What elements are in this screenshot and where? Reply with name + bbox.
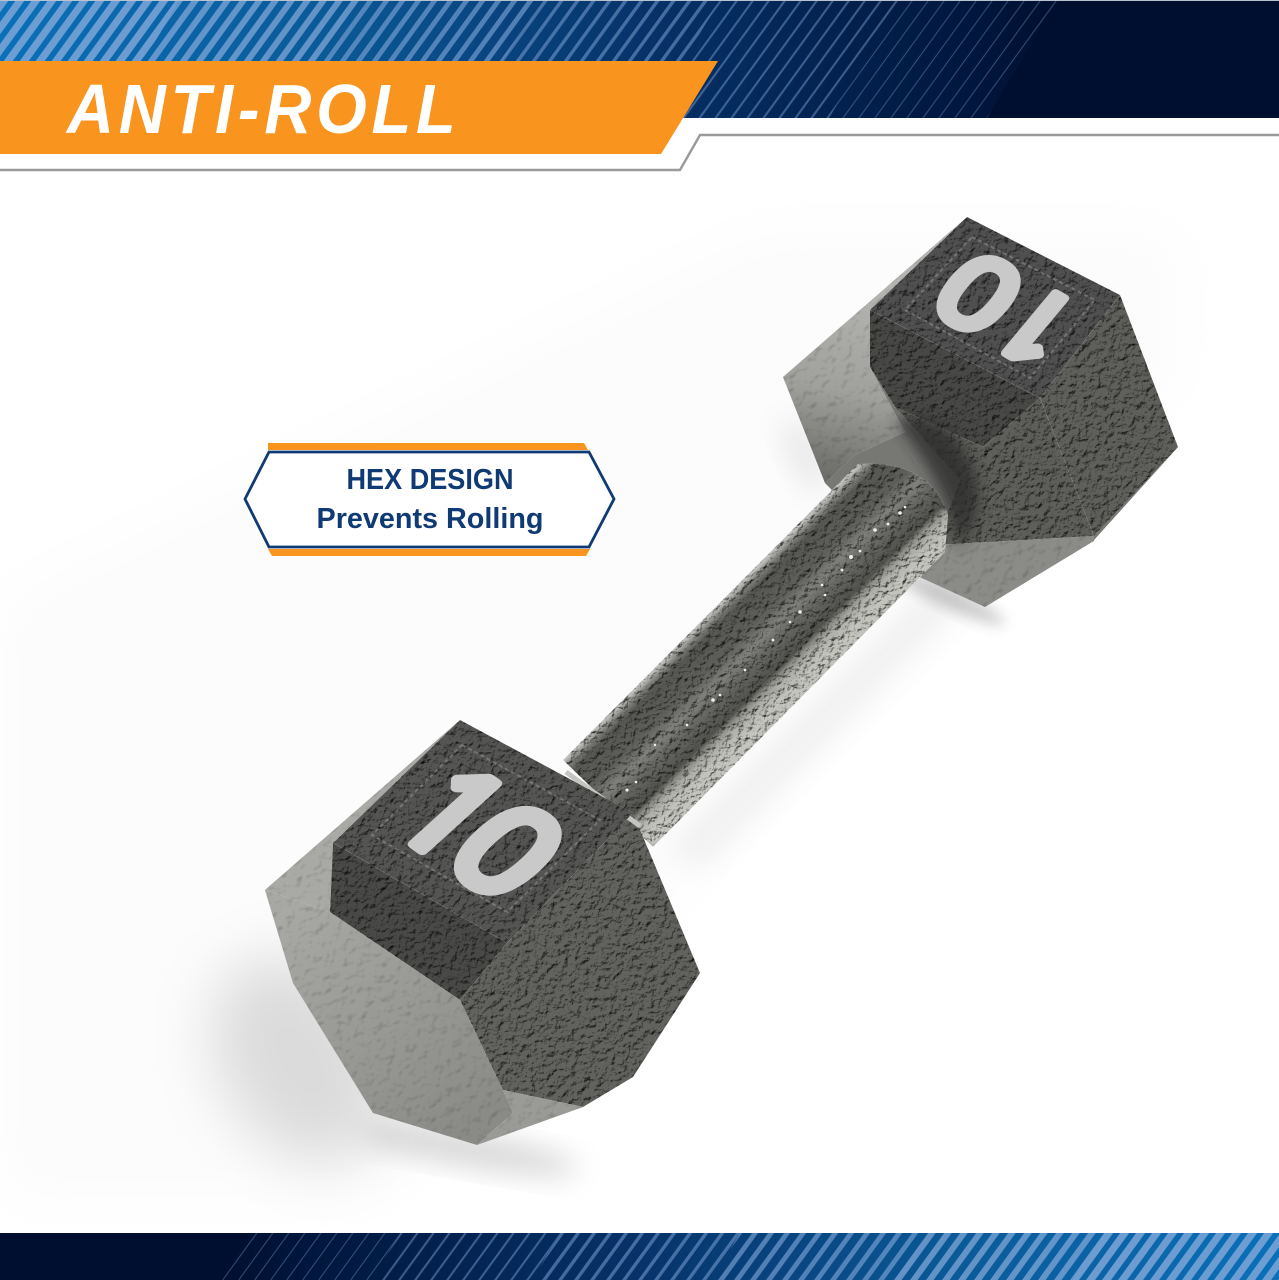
silhouette — [783, 217, 1178, 607]
right facet — [460, 813, 700, 1107]
header band — [0, 0, 1279, 118]
footer band — [0, 1233, 1279, 1280]
callout: hex design — [245, 443, 614, 556]
embossed number upper: 10 — [920, 235, 1104, 382]
number face — [870, 217, 1120, 398]
upper-left light facet — [265, 720, 460, 912]
silhouette — [265, 720, 700, 1145]
embossed number lower: 10 — [365, 747, 582, 919]
lower light facet — [913, 536, 1094, 607]
hammered mid facet — [895, 398, 1094, 545]
bar glints — [625, 506, 906, 792]
callout subtext: Prevents Rolling — [316, 503, 544, 535]
number panel frame — [905, 237, 1095, 378]
left light facet — [783, 217, 967, 483]
dark pebbled facet — [870, 310, 1040, 447]
bar handle — [563, 464, 948, 847]
header white notch and grey rule — [0, 118, 1279, 171]
callout heading: HEX DESIGN — [346, 464, 514, 496]
fillet shadow around bar — [895, 417, 978, 548]
light bevel edge — [566, 772, 640, 826]
title banner — [0, 61, 718, 154]
dumbbell — [265, 217, 1178, 1145]
lower weight head — [265, 720, 700, 1145]
soft floor shading — [0, 230, 1180, 1200]
number panel frame — [372, 745, 600, 912]
bottom sliver facet — [477, 1090, 583, 1145]
right facet — [1040, 295, 1178, 536]
dark wedge facet — [330, 843, 507, 1000]
large lower light facet — [265, 890, 513, 1145]
dumbbell shadows — [176, 412, 1009, 1195]
title text: ANTI-ROLL — [65, 71, 456, 149]
upper weight head — [783, 217, 1178, 607]
number face — [333, 720, 633, 943]
